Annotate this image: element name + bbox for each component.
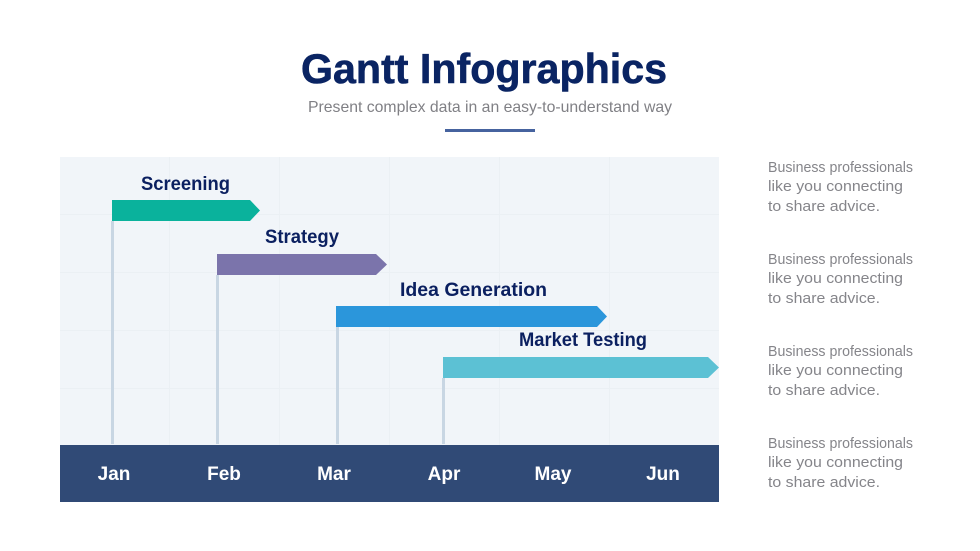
description 3: Business professionals xyxy=(768,344,913,360)
drop line: Idea Generation xyxy=(336,327,339,444)
drop line: Screening xyxy=(111,221,114,444)
description 1 xyxy=(768,160,913,215)
description 1: Business professionals xyxy=(768,160,913,176)
subtitle: Present complex data in an easy-to-understand way xyxy=(308,99,672,116)
description 2: Business professionals xyxy=(768,252,913,268)
label: Strategy: Strategy xyxy=(265,227,339,248)
description 1: like you connecting xyxy=(768,179,903,195)
drop line: Market Testing xyxy=(442,378,445,444)
description 4: Business professionals xyxy=(768,436,913,452)
description 2 xyxy=(768,252,913,307)
label: Idea Generation: Idea Generation xyxy=(400,280,547,301)
description 3: like you connecting xyxy=(768,363,903,379)
bar: Screening xyxy=(112,200,260,221)
bar: Idea Generation xyxy=(336,306,607,327)
description 4: like you connecting xyxy=(768,455,903,471)
description 4 xyxy=(768,436,913,491)
title: Gantt Infographics xyxy=(301,45,667,92)
description 1: to share advice. xyxy=(768,199,880,215)
month axis band: Feb xyxy=(207,464,241,485)
description 2: like you connecting xyxy=(768,271,903,287)
description 3 xyxy=(768,344,913,399)
description 2: to share advice. xyxy=(768,291,880,307)
label: Market Testing: Market Testing xyxy=(519,330,647,351)
chart panel xyxy=(60,157,719,445)
month axis band: Mar xyxy=(317,464,351,485)
month axis band: May xyxy=(535,464,572,485)
bar: Market Testing xyxy=(443,357,719,378)
label: Screening: Screening xyxy=(141,174,230,195)
month axis band: Jun xyxy=(646,464,680,485)
month axis band: Apr xyxy=(428,464,461,485)
title underline xyxy=(445,129,535,132)
month axis band: Jan xyxy=(98,464,130,485)
description 4: to share advice. xyxy=(768,475,880,491)
drop line: Strategy xyxy=(216,275,219,444)
bar: Strategy xyxy=(217,254,387,275)
description 3: to share advice. xyxy=(768,383,880,399)
month axis band xyxy=(60,445,719,502)
